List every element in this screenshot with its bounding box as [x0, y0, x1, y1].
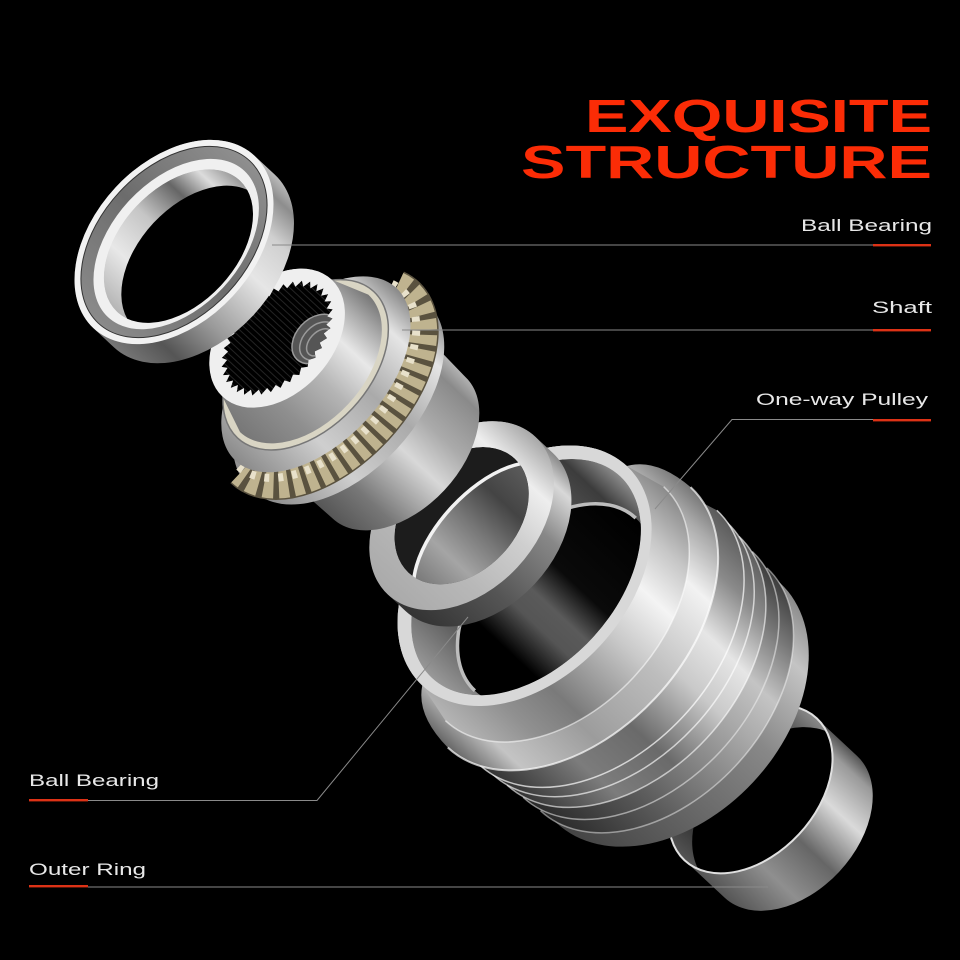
- shaft: [209, 268, 480, 530]
- middle ball bearing: [369, 421, 572, 626]
- pulley interior: [411, 459, 641, 696]
- shaft front collar: [186, 242, 446, 507]
- title line 2: STRUCTURE: [521, 136, 932, 188]
- one-way pulley: [398, 446, 809, 847]
- bearing inner race: [61, 127, 291, 361]
- callout: ball bearing lower: [29, 617, 468, 801]
- bearing seal: [44, 110, 304, 374]
- ring front face: [332, 385, 591, 646]
- title line 1: EXQUISITE: [585, 90, 932, 142]
- bearing inner wall: [104, 169, 253, 323]
- inner thread: [291, 314, 332, 364]
- bearing outer race: [35, 101, 313, 383]
- callout: ball bearing lower: Ball Bearing: [29, 771, 159, 790]
- callout: ball bearing top: Ball Bearing: [801, 216, 932, 235]
- pulley body: [340, 388, 743, 794]
- shaft front face: [182, 242, 372, 434]
- callout: shaft: Shaft: [872, 298, 932, 317]
- top ball bearing: [74, 140, 294, 364]
- callout: one-way pulley: One-way Pulley: [756, 390, 929, 409]
- title: [521, 90, 932, 188]
- collar groove: [191, 248, 421, 482]
- needle rollers: [230, 282, 456, 517]
- roller rear lip: [193, 248, 484, 543]
- shaft cylinder: [173, 232, 412, 473]
- pulley rear flange: [447, 481, 865, 902]
- pulley shoulder: [328, 375, 777, 828]
- pulley grooves: [381, 418, 854, 893]
- pulley front rim: [347, 396, 702, 756]
- outer ring: [670, 707, 873, 911]
- exploded bearing assembly: [74, 140, 873, 911]
- callout: one-way pulley: [655, 390, 931, 509]
- ring bore: [394, 447, 529, 584]
- splined bore: [222, 280, 333, 396]
- bearing outer wall: [35, 101, 333, 402]
- callout: outer ring: Outer Ring: [29, 860, 146, 879]
- ring outer wall: [332, 385, 608, 663]
- shaft rear barrel: [229, 279, 513, 563]
